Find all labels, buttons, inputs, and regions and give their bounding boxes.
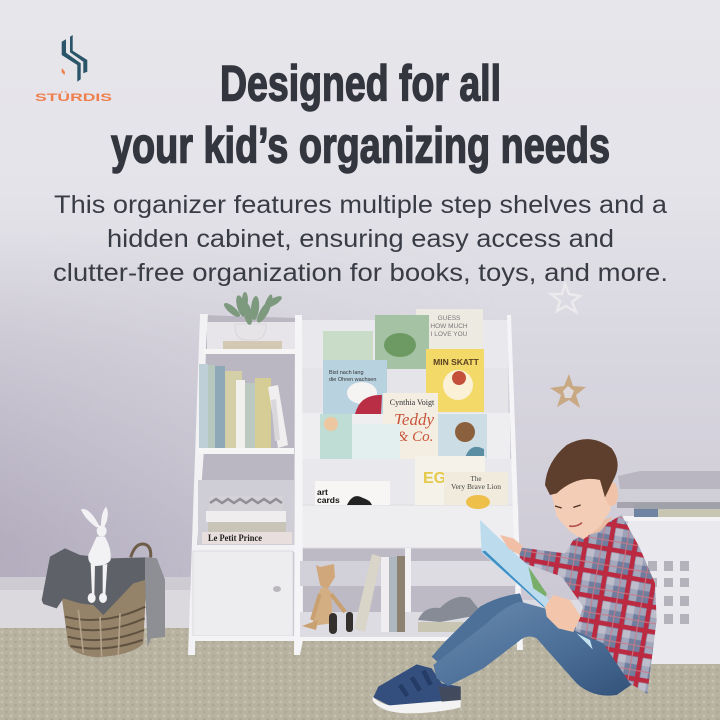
books on display: Teddy (394, 410, 434, 429)
logo: Stürdis (35, 35, 112, 104)
tier panels (300, 368, 508, 414)
right side panels (294, 315, 303, 655)
book title: Le Petit Prince: Le Petit Prince (208, 533, 262, 543)
potted plant (222, 292, 283, 340)
left unit shelves (203, 349, 296, 354)
cabinet base (189, 636, 295, 641)
books on display: Bist nach lang (329, 370, 364, 376)
title: Designed for all (220, 56, 501, 112)
grey blanket (42, 548, 165, 647)
upright books (199, 364, 288, 448)
books on display: The (471, 475, 481, 483)
wicker handle (131, 544, 151, 557)
toy fox (302, 564, 353, 634)
toy bunny (81, 507, 111, 603)
smile (569, 523, 582, 526)
top book (223, 341, 282, 349)
carpet floor (0, 628, 720, 720)
books on display: die Ohren wachsen (329, 377, 376, 383)
title (111, 56, 610, 174)
baseboard (0, 577, 630, 630)
icon: wooden star (550, 374, 586, 408)
cube cutouts (648, 561, 689, 624)
left unit back and sides (192, 315, 296, 640)
plaid shirt (519, 515, 657, 694)
lower compartment dividers (405, 548, 411, 638)
stacked boxes and books (617, 471, 720, 517)
right unit back and frame (296, 320, 508, 368)
books on display: cards (317, 495, 340, 505)
ear (605, 482, 618, 506)
stacked books (202, 496, 292, 544)
cabinet door (193, 551, 293, 636)
books on display: EG (423, 470, 446, 487)
description text: hidden cabinet, ensuring easy access and (107, 225, 614, 253)
neck (583, 517, 613, 537)
books on display: Very Brave Lion (451, 482, 501, 491)
far leg (432, 593, 530, 677)
logo mark (62, 35, 87, 82)
door knob (273, 586, 281, 592)
description text: clutter-free organization for books, toys, and more. (53, 259, 668, 287)
lower shelf books (354, 554, 405, 632)
bookcase: left unit (188, 292, 296, 655)
hair (545, 439, 618, 497)
hands (500, 535, 523, 555)
logo accent (62, 68, 65, 75)
books on display (315, 309, 508, 509)
books on display: art (317, 487, 328, 497)
description text (53, 191, 668, 287)
books on display: MIN SKATT (433, 357, 480, 367)
basket with blanket (42, 507, 165, 657)
icon: small white star (551, 284, 580, 312)
books on display: I LOVE YOU (431, 331, 468, 338)
books on display: & Co. (397, 429, 433, 445)
toy dinosaur on books (418, 597, 492, 632)
bookcase: right unit (294, 309, 523, 655)
open book (480, 520, 593, 649)
boy reading a book (373, 439, 657, 713)
books on display: GUESS (438, 315, 461, 322)
face (552, 475, 611, 539)
front bin (297, 505, 518, 548)
sneaker (373, 664, 461, 713)
near leg (433, 602, 633, 696)
white cube storage (617, 471, 720, 664)
description text: This organizer features multiple step shelves and a (54, 191, 667, 219)
books on display: HOW MUCH (430, 323, 468, 330)
logo wordmark: STÜRDIS (35, 91, 112, 104)
books on display: Cynthia Voigt (390, 398, 435, 407)
wicker basket (62, 577, 147, 657)
background wall (0, 252, 720, 600)
eyes (555, 505, 581, 508)
